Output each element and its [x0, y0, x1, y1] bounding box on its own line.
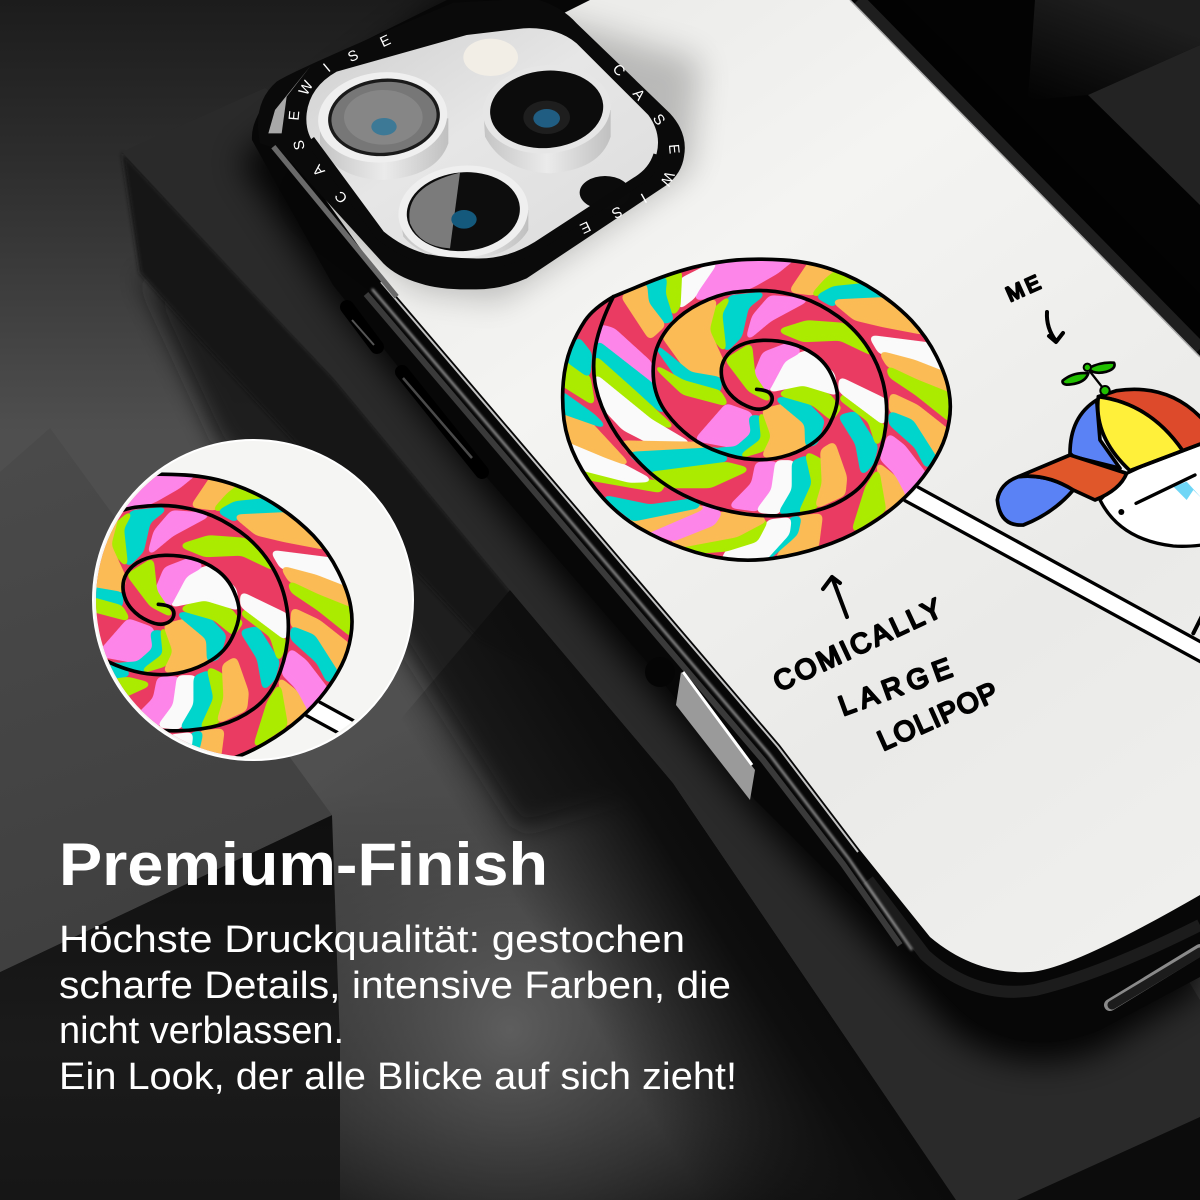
- handwritten caption: COMICALLY: [768, 592, 947, 697]
- inset lollipop detail: [96, 472, 355, 757]
- right block top face: [1088, 45, 1200, 205]
- bumper lettering: CASEWISE left: A: [310, 161, 329, 179]
- inset disc: [93, 440, 413, 760]
- camera window: [306, 28, 658, 260]
- lens: main: [395, 160, 532, 263]
- handwritten caption: LARGE: [834, 652, 956, 722]
- central floor glow: [190, 700, 830, 1200]
- handwritten label: me: ME: [1003, 271, 1044, 307]
- illustration: comically large lollipop: [557, 253, 1200, 663]
- eye: [1118, 509, 1124, 515]
- bumper lettering: CASEWISE left: S: [346, 47, 361, 66]
- bumper lettering: CASEWISE right: E: [665, 143, 682, 155]
- propeller hub: [1100, 386, 1110, 395]
- pedestal side face: [122, 152, 600, 700]
- bumper lettering: CASEWISE left: W: [296, 78, 317, 98]
- bottom rim band: [868, 880, 1200, 992]
- edge highlight right: [850, 0, 1200, 357]
- bumper lettering: CASEWISE left: S: [291, 139, 309, 151]
- cap blue panel: [1070, 400, 1120, 468]
- arrow: down to character: [1047, 312, 1063, 342]
- case band grey: [366, 294, 900, 945]
- phone back panel: [290, 0, 1200, 972]
- bumper lettering: CASEWISE left: C: [332, 187, 351, 206]
- button: side: [645, 657, 755, 800]
- tear: [1173, 482, 1200, 510]
- arrow: up to lollipop: [823, 577, 847, 617]
- cap yellow panel: [1098, 397, 1183, 471]
- case strip along bumper: [273, 147, 397, 297]
- camera bumper ring: [258, 0, 685, 289]
- bumper lettering: CASEWISE right: S: [609, 202, 624, 221]
- body text: Ein Look, der alle Blicke auf sich zieht!: [59, 1056, 737, 1098]
- propeller stem: [1087, 367, 1105, 391]
- camera module: [258, 0, 685, 297]
- case highlight line: [372, 289, 912, 950]
- bumper lettering: CASEWISE right: E: [577, 217, 593, 236]
- bumper lettering: CASEWISE right: C: [609, 61, 628, 80]
- bottom right shadow floor: [1017, 1117, 1200, 1200]
- button: mute: [347, 307, 377, 347]
- cap red panel: [1098, 389, 1200, 451]
- button: volume: [402, 372, 482, 472]
- phone case body: [252, 0, 1200, 1042]
- pedestal side shadow lower: [400, 590, 956, 1200]
- right rim: [858, 0, 1200, 349]
- bumper lettering: CASEWISE left: [287, 32, 394, 206]
- phone: [240, 0, 1200, 1061]
- bumper lettering: CASEWISE left: E: [378, 32, 394, 51]
- character with propeller hat: [997, 363, 1200, 633]
- face line: [1136, 475, 1195, 503]
- hand: [1193, 617, 1200, 633]
- bumper lower lip: [310, 140, 658, 263]
- propeller blades: [1062, 363, 1115, 385]
- cap seam: [1130, 437, 1200, 471]
- handwritten caption: [768, 592, 1002, 756]
- bumper lettering: CASEWISE right: S: [649, 111, 668, 129]
- bumper lettering: CASEWISE right: I: [638, 189, 649, 205]
- headline and body copy: [59, 831, 737, 1098]
- phone drop shadow: [240, 0, 1200, 1061]
- propeller cap: [1084, 364, 1091, 371]
- back block glow: [1028, 0, 1200, 100]
- handwritten caption: LOLIPOP: [873, 676, 1002, 756]
- body text: nicht verblassen.: [59, 1010, 344, 1052]
- bumper lettering: CASEWISE right: A: [629, 86, 648, 104]
- lower block front face: [0, 815, 340, 1200]
- glass strip on case corner: [268, 67, 310, 133]
- camera shadow: [300, 10, 700, 300]
- zoom inset circle: [92, 439, 414, 761]
- lens: tele: [479, 60, 614, 173]
- visor underside: [997, 476, 1073, 525]
- flash: [463, 39, 518, 76]
- pedestal soft contact shadow: [140, 273, 673, 830]
- body text: Höchste Druckqualität: gestochen: [59, 919, 685, 961]
- head: [1100, 433, 1200, 546]
- visor top: [1018, 455, 1127, 500]
- edge highlight left: [381, 282, 858, 852]
- body text: scharfe Details, intensive Farben, die: [59, 965, 731, 1007]
- bumper lettering: CASEWISE left: E: [287, 110, 303, 121]
- bumper lettering: CASEWISE right: W: [656, 169, 677, 188]
- lidar sensor: [580, 176, 630, 209]
- top right dark area: [700, 0, 1200, 400]
- bumper lettering: CASEWISE right: [577, 61, 682, 236]
- lower block top face: [0, 428, 332, 972]
- title: Premium-Finish: [59, 831, 548, 898]
- bumper lettering: CASEWISE left: I: [321, 61, 334, 76]
- charging port: [1110, 950, 1200, 1005]
- body text: [59, 919, 737, 1098]
- lens: wide: [314, 67, 451, 180]
